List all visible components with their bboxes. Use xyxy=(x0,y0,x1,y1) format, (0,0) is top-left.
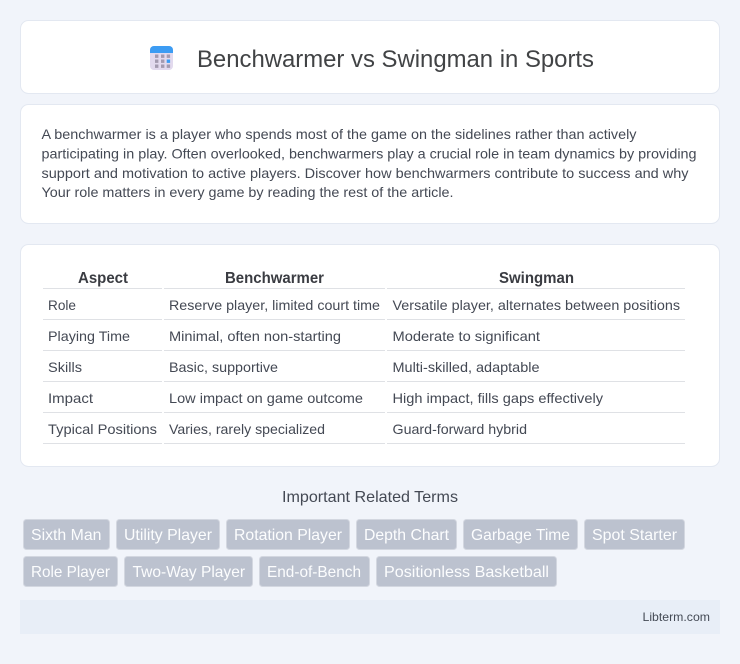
text block: description: A benchwarmer is a player who spends most of the game on the sidelines rather than actively xyxy=(42,126,636,142)
table row: playing time: Moderate to significant xyxy=(392,328,540,344)
chip: Utility Player: Utility Player xyxy=(124,527,213,544)
table row: role: Role xyxy=(48,297,76,313)
chip: Role Player: Role Player xyxy=(31,564,111,581)
chip: Positionless Basketball xyxy=(376,556,556,586)
title: Benchwarmer vs Swingman in Sports xyxy=(197,46,594,73)
table row: role xyxy=(43,297,685,320)
table row: skills: Skills xyxy=(48,359,82,375)
table header row xyxy=(43,270,685,289)
table row: playing time: Minimal, often non-starting xyxy=(169,328,341,344)
chip: End-of-Bench xyxy=(260,556,370,586)
table row: typical positions: Typical Positions xyxy=(48,421,157,437)
table header row: Swingman xyxy=(499,270,574,287)
table row: role: Reserve player, limited court time xyxy=(169,297,380,313)
text block: description: Your role matters in every game by reading the rest of the article. xyxy=(42,184,454,200)
heading: related terms: Important Related Terms xyxy=(282,489,458,506)
chip: Depth Chart: Depth Chart xyxy=(364,527,450,544)
table row: typical positions: Varies, rarely specialized xyxy=(169,421,325,437)
table row: impact: Low impact on game outcome xyxy=(169,390,363,406)
chip: Sixth Man xyxy=(24,520,110,550)
chip: Garbage Time xyxy=(464,520,578,550)
chip: Rotation Player xyxy=(226,520,350,550)
text block: description: participating in play. Often overlooked, benchwarmers play a crucial role in team dynamics by providing xyxy=(42,146,696,162)
panel: intro paragraph xyxy=(20,104,720,224)
panel: related term chips xyxy=(24,520,684,586)
chip: Spot Starter xyxy=(584,520,684,550)
icon: calendar xyxy=(150,46,173,70)
chip: Rotation Player: Rotation Player xyxy=(234,527,343,544)
chip: Two-Way Player xyxy=(124,556,252,586)
table header row: Aspect xyxy=(78,270,129,287)
panel: comparison table xyxy=(20,244,720,466)
footer xyxy=(20,600,720,634)
table row: impact: Impact xyxy=(48,390,93,406)
chip: Spot Starter: Spot Starter xyxy=(592,527,678,544)
chip: Garbage Time: Garbage Time xyxy=(471,527,570,544)
table row: role: Versatile player, alternates between positions xyxy=(392,297,680,313)
chip: Sixth Man: Sixth Man xyxy=(31,527,102,544)
chip: End-of-Bench: End-of-Bench xyxy=(267,564,361,581)
chip: Role Player xyxy=(24,556,118,586)
table row: playing time xyxy=(43,328,685,351)
chip: Positionless Basketball: Positionless Basketball xyxy=(384,564,549,581)
table row: impact xyxy=(43,390,685,413)
panel: header xyxy=(20,20,720,94)
table row: typical positions xyxy=(43,421,685,444)
chip: Two-Way Player: Two-Way Player xyxy=(132,564,246,581)
table header row: Benchwarmer xyxy=(225,270,324,287)
table row: typical positions: Guard-forward hybrid xyxy=(392,421,527,437)
table row: skills xyxy=(43,359,685,382)
table row: playing time: Playing Time xyxy=(48,328,130,344)
table row: skills: Basic, supportive xyxy=(169,359,278,375)
footer credit: Libterm.com xyxy=(642,610,710,624)
chip: Utility Player xyxy=(116,520,220,550)
text block: description xyxy=(42,126,696,200)
table row: impact: High impact, fills gaps effectively xyxy=(392,390,603,406)
chip: Depth Chart xyxy=(356,520,456,550)
text block: description: support and motivation to active players. Discover how benchwarmers contribute to success and why xyxy=(42,165,688,181)
table row: skills: Multi-skilled, adaptable xyxy=(392,359,540,375)
